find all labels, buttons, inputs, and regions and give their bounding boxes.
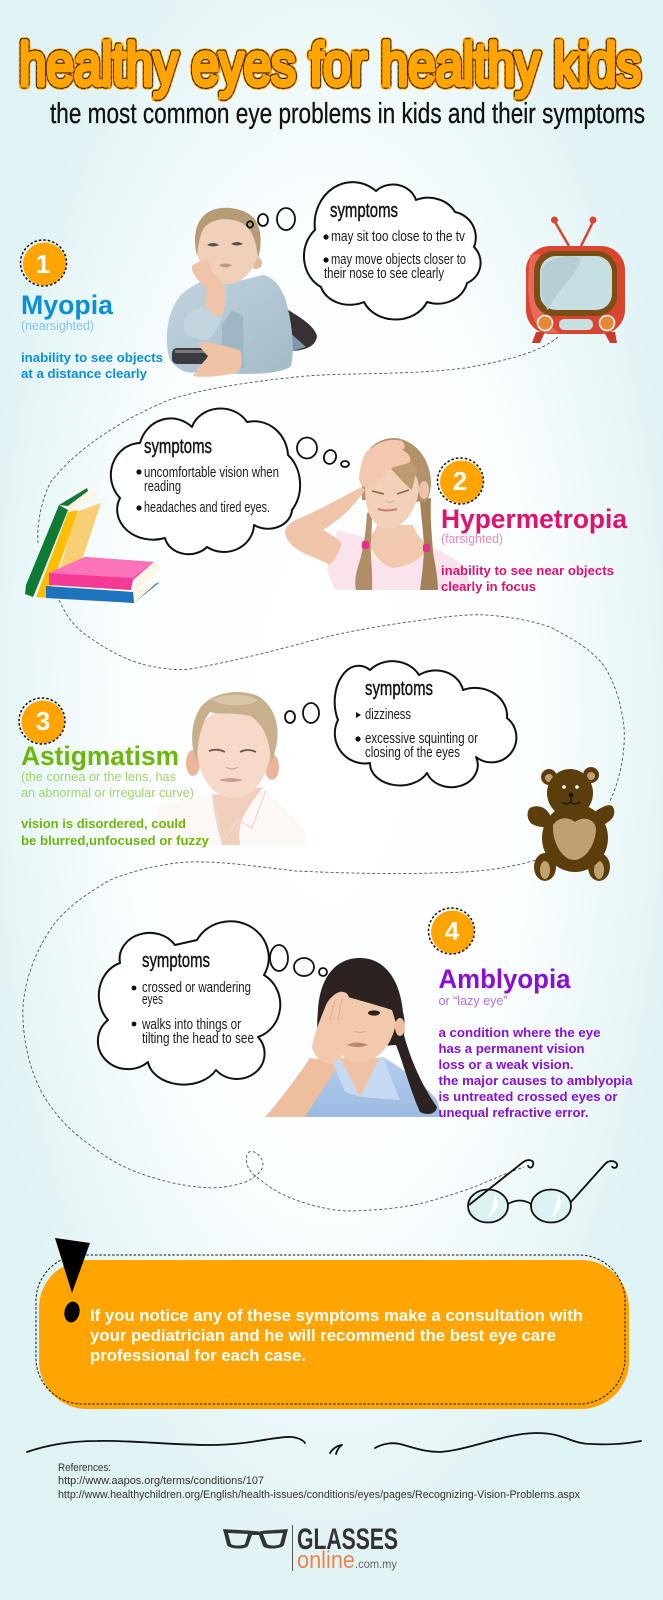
badge 4: 4 xyxy=(445,916,460,946)
icon: teddy bear xyxy=(528,767,614,881)
panel: myopia xyxy=(20,182,481,381)
description: astigmatism xyxy=(21,816,210,848)
icon: stack of books xyxy=(25,488,161,603)
badge 1: 1 xyxy=(36,249,50,279)
description: myopia xyxy=(21,350,163,381)
references xyxy=(58,1462,580,1501)
logo: Glasses Online xyxy=(223,1523,398,1574)
icon: television xyxy=(526,216,625,343)
thought cloud: astigmatism symptoms: excessive squinting or xyxy=(365,731,478,747)
thought dots xyxy=(297,438,349,467)
thought cloud: hypermetropia symptoms: uncomfortable vision when xyxy=(144,465,279,481)
thought cloud: myopia symptoms: symptoms xyxy=(330,200,398,222)
thought cloud: amblyopia symptoms: walks into things or xyxy=(141,1017,241,1033)
description: amblyopia: has a permanent vision xyxy=(438,1041,585,1056)
logo: Glasses Online: online xyxy=(297,1547,355,1574)
description: astigmatism: be blurred,unfocused or fuzzy xyxy=(21,833,210,848)
badge 1 xyxy=(20,240,66,286)
subheading: nearsighted: (nearsighted) xyxy=(21,318,94,333)
badge 2: 2 xyxy=(453,466,467,496)
description: astigmatism: vision is disordered, could xyxy=(21,816,186,831)
thought cloud: myopia symptoms: their nose to see clearly xyxy=(324,266,445,282)
badge 3 xyxy=(19,698,65,744)
panel: hypermetropia xyxy=(111,409,628,594)
panel: astigmatism xyxy=(19,661,516,848)
thought cloud: hypermetropia symptoms: headaches and tired eyes. xyxy=(144,500,270,516)
logo: Glasses Online: .com.my xyxy=(355,1557,397,1571)
references: http://www.healthychildren.org/English/health-issues/conditions/eyes/pages/Recognizing-Vision-Problems.aspx xyxy=(58,1489,580,1501)
badge 3: 3 xyxy=(36,706,50,736)
thought cloud: hypermetropia symptoms xyxy=(111,409,300,554)
description: amblyopia: the major causes to amblyopia xyxy=(438,1073,633,1088)
references: http://www.aapos.org/terms/conditions/107 xyxy=(58,1475,264,1487)
callout: consult your pediatrician xyxy=(36,1238,629,1409)
thought cloud: myopia symptoms xyxy=(304,182,481,319)
dashed connector path xyxy=(23,337,624,1211)
photo: boy lying with remote xyxy=(167,208,317,377)
description: amblyopia xyxy=(438,1025,633,1120)
description: amblyopia: loss or a weak vision. xyxy=(438,1057,574,1072)
callout text: your pediatrician and he will recommend the best eye care xyxy=(90,1326,556,1345)
description: amblyopia: is untreated crossed eyes or xyxy=(438,1089,618,1104)
heading: Astigmatism: Astigmatism xyxy=(21,741,179,771)
badge 2 xyxy=(438,458,484,504)
heading: Myopia: Myopia xyxy=(21,290,114,320)
thought dots xyxy=(247,208,295,230)
thought dots xyxy=(270,945,327,976)
callout text xyxy=(90,1306,583,1365)
subheading: lazy eye: or “lazy eye” xyxy=(438,993,508,1008)
panel: amblyopia xyxy=(98,908,633,1120)
thought dots xyxy=(285,703,319,723)
thought cloud: amblyopia symptoms: symptoms xyxy=(142,950,210,972)
description: hypermetropia xyxy=(441,563,614,594)
thought cloud: astigmatism symptoms: closing of the eyes xyxy=(365,745,460,761)
description: amblyopia: a condition where the eye xyxy=(438,1025,600,1040)
subheading: cornea note xyxy=(21,769,194,800)
description: hypermetropia: clearly in focus xyxy=(441,579,536,594)
photo: boy squinting xyxy=(157,692,307,845)
divider squiggle xyxy=(27,1433,641,1454)
logo: Glasses Online: GLASSES xyxy=(297,1523,398,1556)
thought cloud: astigmatism symptoms: dizziness xyxy=(365,707,411,723)
thought cloud: amblyopia symptoms: crossed or wandering xyxy=(142,980,251,996)
thought cloud: astigmatism symptoms xyxy=(335,661,516,787)
badge 4 xyxy=(428,908,474,954)
thought cloud: myopia symptoms: may move objects closer to xyxy=(331,252,466,268)
subheading: cornea note: (the cornea or the lens, has xyxy=(21,769,176,784)
heading: Amblyopia: Amblyopia xyxy=(438,964,571,994)
thought cloud: hypermetropia symptoms: reading xyxy=(144,479,181,495)
description: hypermetropia: inability to see near objects xyxy=(441,563,614,578)
photo: girl covering one eye xyxy=(265,958,442,1117)
references: References: xyxy=(58,1462,111,1474)
icon: exclamation mark xyxy=(55,1238,90,1324)
thought cloud: astigmatism symptoms: symptoms xyxy=(365,678,433,700)
subheading: farsighted: (farsighted) xyxy=(441,531,503,546)
thought cloud: amblyopia symptoms xyxy=(98,921,280,1085)
description: myopia: inability to see objects xyxy=(21,350,163,365)
heading: Hypermetropia: Hypermetropia xyxy=(441,504,628,534)
photo: girl holding forehead xyxy=(285,438,470,590)
subheading: cornea note: an abnormal or irregular curve) xyxy=(21,785,194,800)
description: amblyopia: unequal refractive error. xyxy=(438,1105,588,1120)
thought cloud: myopia symptoms: may sit too close to the tv xyxy=(331,229,466,245)
thought cloud: amblyopia symptoms: eyes xyxy=(142,992,163,1008)
thought cloud: hypermetropia symptoms: symptoms xyxy=(144,436,212,458)
callout text: If you notice any of these symptoms make a consultation with xyxy=(90,1306,583,1325)
icon: glasses xyxy=(468,1160,617,1222)
thought cloud: amblyopia symptoms: tilting the head to see xyxy=(142,1031,254,1047)
callout text: professional for each case. xyxy=(90,1346,306,1365)
description: myopia: at a distance clearly xyxy=(21,366,148,381)
